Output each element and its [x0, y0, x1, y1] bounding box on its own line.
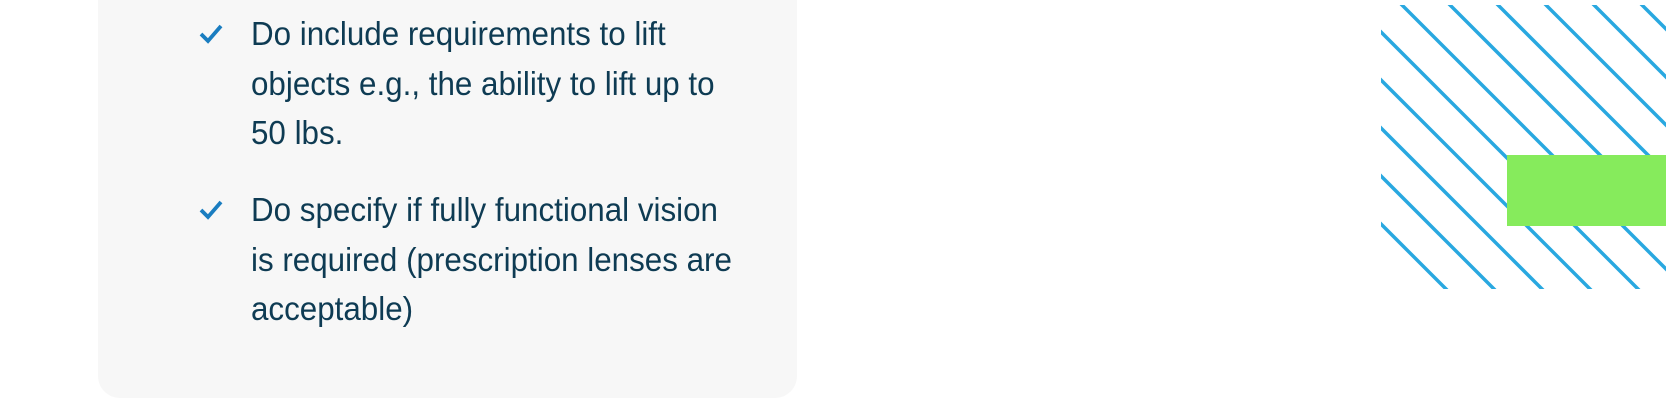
text: vision: is required (prescription lenses are: [251, 240, 732, 278]
text: vision: Do specify if fully functional vision: [251, 191, 718, 228]
text: lift: [251, 15, 715, 151]
text: vision: acceptable): [251, 290, 413, 327]
green block: [1507, 155, 1666, 226]
item: vision requirement: [200, 191, 732, 327]
panel: do list: [98, 0, 797, 398]
icon: check: [200, 200, 222, 220]
decoration: hatch pattern with green block: [1381, 5, 1666, 289]
text: lift: Do include requirements to lift: [251, 15, 666, 52]
text: lift: 50 lbs.: [251, 114, 343, 151]
item: lift requirement: [200, 15, 715, 151]
icon: check: [200, 24, 222, 44]
text: lift: objects e.g., the ability to lift up to: [251, 64, 715, 102]
text: vision: [251, 191, 732, 327]
